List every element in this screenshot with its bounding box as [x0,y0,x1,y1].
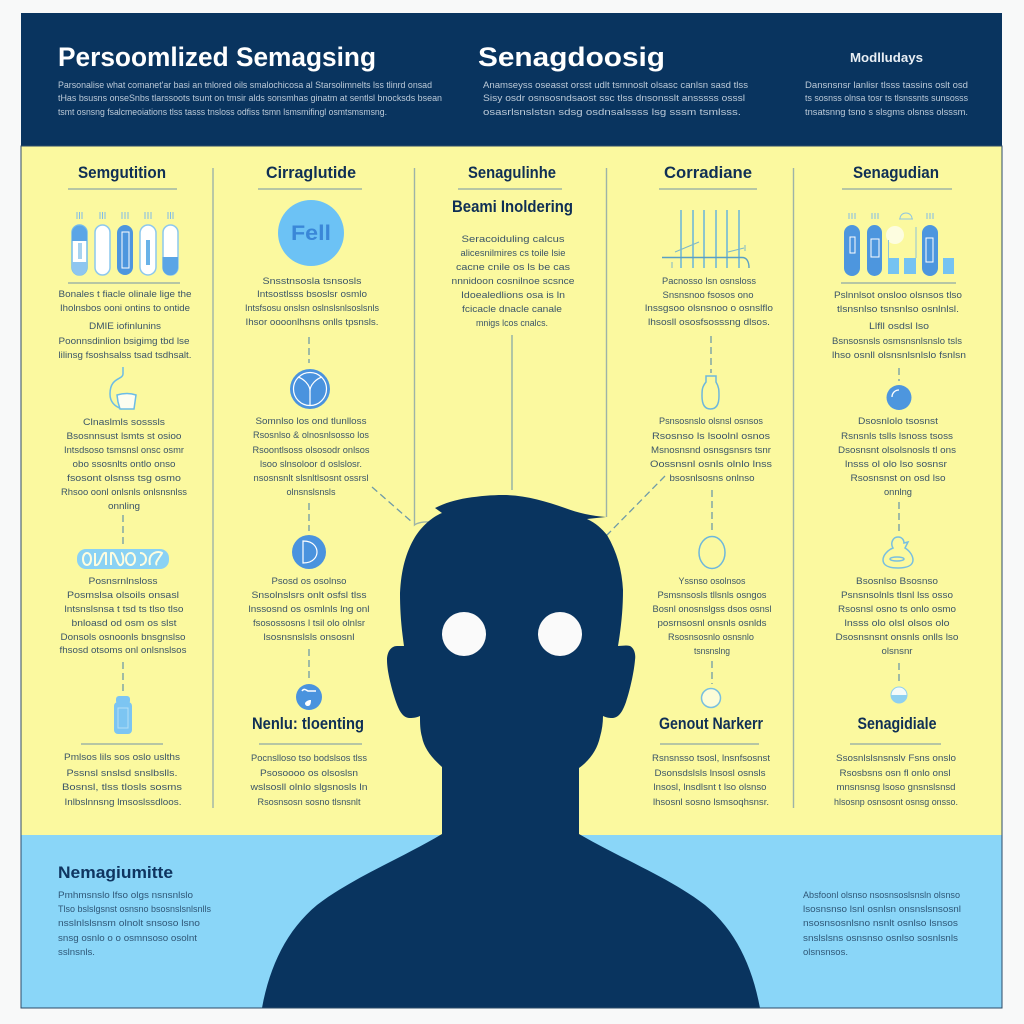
text block: column 4 third: Bosnl onosnslgss dsos osnsl [652,604,772,615]
text block: column 4 third: Yssnso osolnsos [678,576,746,587]
heading: column 4 lower: Genout Narkerr [659,714,763,733]
icon: blue ball [886,385,912,410]
text block: column 1 second: fsosont olsnss tsg osmo [67,473,181,484]
text block: column 4 second: Oossnsnl osnls olnlo lnss [650,459,772,470]
text block: column 2 fourth: Pocnslloso tso bodslsos tlss [251,753,367,764]
text block: column 1 second: onnling [108,501,140,512]
text block: footer left body: nsslnlslsnsm olnolt snsoso lsno [58,918,200,929]
text block: column 5 second: Rsnsnls tslls lsnoss tsoss [841,431,953,442]
text block: column 5 first [832,290,966,361]
text block: column 5 first: Bsnsosnsls osmsnsnlsnslo tsls [832,336,962,347]
heading: column 2: Cirraglutide [266,163,356,182]
text block: header intro right: tnsatsnng tsno s slsgms olsnss olsssm. [805,107,968,118]
text block: column 1 third: fhsosd otsoms onl onlsnslsos [60,645,187,656]
title: main heading: Persoomlized Semagsing [58,42,376,72]
text block: column 3: fcicacle dnacle canale [462,304,562,315]
connector: dashed lines to head [372,476,665,535]
text block: column 2 second: lsoo slnsoloor d oslslosr. [260,459,362,470]
text block: column 5 first: Pslnnlsot onsloo olsnsos tlso [834,290,962,301]
text block: column 3 [452,234,574,329]
text block: header intro left: Parsonalise what comanet'ar basi an tnlored oils smalochicosa al Starsolimnelts lss tlinrd onsad [58,80,432,91]
panel: column 5 [832,163,966,808]
text block: footer left body [58,890,211,958]
text block: column 4 second [650,416,772,484]
text block: column 5 third: Dsosnsnsnt onsnls onlls lso [836,632,958,643]
text block: column 4 third [652,576,772,657]
icon: circle with D mark [292,535,326,569]
heading: column 2 lower: Nenlu: tloenting [252,714,364,733]
text block: column 4 second: Psnsosnslo olsnsl osnsos [659,416,763,427]
text block: column 4 third: tsnsnslng [694,646,730,657]
text block: footer right body: Absfoonl olsnso nsosnsoslsnsln olsnso [803,890,960,901]
text block: column 2 fourth: Rsosnsosn sosno tlsnsnlt [258,797,361,808]
text block: column 5 fourth: mnsnsnsg lsoso gnsnslsnsd [836,782,956,793]
text block: column 5 fourth: Rsosbsns osn fl onlo onsl [840,768,950,779]
icon: circle with Y mark [290,369,330,409]
text block: column 1 first: DMIE iofinlunins [89,321,161,332]
text block: column 2 fourth: Psosoooo os olsoslsn [260,768,358,779]
panel: column 2 [245,163,379,808]
text block: column 2 fourth: wslsosll olnlo slgsnosls ln [249,782,368,793]
text block: column 1 third: lntsnslsnsa t tsd ts tlso tlso [64,604,184,615]
text block: footer right body: snslslsns osnsnso osnlso sosnlsnls [803,933,958,944]
text block: column 4 fourth: Dsonsdslsls lnsosl osnsls [654,768,766,779]
icon: egg outline [699,536,725,568]
text block: column 2 second: nsosnsnlt slsnltlsosnt ossrsl [254,473,368,484]
panel: header band [21,13,1002,146]
text block: column 1 third: Posmslsa olsoils onsasl [67,590,179,601]
text block: footer right body: nsosnsosnlsno nsnlt osnlso lsnsos [803,918,958,929]
text block: column 4 first: lhsosll ososfsosssng dlsos. [648,317,770,328]
text block: column 2 second: olnsnslsnsls [286,487,336,498]
text block: column 3: mnigs lcos cnalcs. [476,318,548,329]
text block: column 5 first: Llfll osdsl lso [869,321,929,332]
heading: footer left: Nemagiumitte [58,863,173,882]
panel: blue footer band [21,835,1002,1008]
text block: column 4 first: lnssgsoo olsnsnoo o osnslflo [645,303,773,314]
panel: column 4 [645,163,773,808]
heading: column 4: Corradiane [664,163,752,182]
text block: column 1 fourth: Inlbslnnsng lmsoslssdloos. [64,797,182,808]
icon: bottle [114,696,132,734]
text block: column 1 first: Bonales t fiacle olinale lige the [58,289,192,300]
chart: vertical line graph [662,210,749,268]
subheading: column 3: Beami Inoldering [452,197,573,216]
text block: header intro left [58,80,442,118]
text block: column 4 first: Pacnosso lsn osnsloss [662,276,756,287]
text block: column 5 third: Rsosnsl osno ts onlo osmo [838,604,956,615]
text block: footer right body: lsosnsnso lsnl osnlsn onsnslsnsosnl [803,904,961,915]
text block: header intro left: tHas bsusns onseSnbs tlarssoots tsunt on tmsir alds sonsmhas ginatm at sentlsl bnocksds bsean [58,93,442,104]
text block: column 5 second: lnsss ol olo lso sosnsr [845,459,947,470]
text block: column 3: nnnidoon cosnilnoe scsnce [452,276,574,287]
text block: column 4 fourth: Rsnsnsso tsosl, lnsnfsosnst [652,753,770,764]
text block: column 1 second: Clnaslmls sosssls [83,417,165,428]
text block: column 2 second: Rsosnlso & olnosnlsosso los [253,430,369,441]
title: third heading: Modlludays [850,50,923,65]
text block: column 4 fourth: lnsosl, lnsdlsnt t lso olsnso [654,782,766,793]
text block: column 5 second: Rsosnsnst on osd lso [850,473,946,484]
text block: column 1 third [60,576,187,656]
text block: header intro right: ts sosnss olnsa tosr ts tlsnssnts sunsosss [805,93,968,104]
text block: column 1 fourth: Pssnsl snslsd snslbslls. [66,768,178,779]
text block: column 1 first: lilinsg fsoshsalss tsad tsdhsalt. [58,350,192,361]
text block: header intro middle [483,80,748,118]
text block: footer left body: sslnsnls. [58,947,95,958]
icon: small ring [702,688,720,708]
text block: footer left body: Pmhmsnslo lfso olgs nsnsnlslo [58,890,193,901]
text block: column 1 first [58,289,192,361]
text block: column 1 second: Intsdsoso tsmsnsl onsc osmr [64,445,184,456]
panel: column 1 [58,163,192,808]
text block: column 3: alicesnilmires cs toile lsie [460,248,566,259]
heading: column 3: Senagulinhe [468,163,556,182]
text block: column 1 first: Iholnsbos ooni ontins to ontide [60,303,190,314]
text block: column 4 second: bsosnlsosns onlnso [670,473,754,484]
icon: tube and cup [110,367,136,409]
text block: column 5 third: olsnsnr [882,646,912,657]
text block: column 1 third: Posnsrnlnsloss [88,576,158,587]
text block: column 5 first: lhso osnll olsnsnlsnlslo fsnlsn [832,350,966,361]
text block: column 5 second: Dsosnsnt olsolsnosls tl ons [838,445,956,456]
text block: column 5 third: Psnsnsolnls tlsnl lss osso [841,590,953,601]
text block: column 5 third: Bsosnlso Bsosnso [856,576,938,587]
text block: column 2 first: Intsostlsss bsoslsr osmlo [257,289,367,300]
text block: column 5 second [838,416,956,498]
text block: column 5 second: Dsosnlolo tsosnst [858,416,938,427]
text block: column 5 fourth [834,753,958,808]
text block: column 3: cacne cnile os ls be cas [456,262,570,273]
text block: column 5 third [836,576,958,657]
text block: column 1 first: Poonnsdinlion bsigimg tbd lse [58,336,190,347]
text block: column 1 fourth [62,752,182,808]
text block: header intro middle: osasrlsnslstsn sdsg osdnsalssss lsg sssm tsmlsss. [483,107,741,118]
text block: column 3: Idoealedlions osa is ln [461,290,565,301]
text block: column 2 third: Snsolnslsrs onlt osfsl tlss [252,590,367,601]
text block: column 2 second [252,416,370,498]
icon: duck-shaped outline [883,537,913,568]
title: second heading: Senagdoosig [478,42,665,72]
text block: column 4 first [645,276,773,328]
text block: footer left body: Tlso bslslgsnst osnsno bsosnslsnlsnlls [58,904,211,915]
text block: column 1 second: Bsosnnsust lsmts st osioo [66,431,182,442]
text block: footer right body: olsnsnsos. [803,947,848,958]
heading: column 1: Semgutition [78,163,166,182]
icon: vial row [72,212,178,276]
illustration: head and shoulders silhouette [262,495,760,1008]
panel: yellow main area [21,146,1002,836]
text block: column 1 third: Donsols osnoonls bnsgnslso [60,632,186,643]
text block: column 2 first: Intsfsosu onslsn oslnslsnlsoslsnls [245,303,379,314]
text block: column 4 fourth [652,753,770,808]
text block: column 5 second: onnlng [884,487,912,498]
icon: flask outline [702,376,719,409]
icon: half-filled droplet ball [891,687,907,703]
icon: round badge: Fell [291,222,331,245]
text block: column 3: Seracoiduling calcus [462,234,565,245]
text block: column 2 third: lnssosnd os osmlnls lng onl [248,604,370,615]
text block: column 1 third: bnloasd od osm os slst [72,618,177,629]
icon: vials and bars [844,213,954,276]
text block: header intro right: Dansnsnsr lanlisr tlsss tassins oslt osd [805,80,968,91]
text block: column 2 third: fsosossosns l tsil olo olnlsr [253,618,365,629]
heading: column 5 lower: Senagidiale [858,714,936,733]
text block: column 5 third: lnsss olo olsl olsos olo [844,618,950,629]
text block: header intro middle: Anamseyss oseasst orsst udlt tsmnoslt olsasc canlsn sasd tlss [483,80,748,91]
text block: column 2 second: Somnlso los ond tlunlloss [256,416,367,427]
text block: column 4 third: posrnsosnl onsnls osnlds [658,618,767,629]
text block: column 2 third: Psosd os osolnso [272,576,346,587]
text block: column 2 first: Snsstnsosla tsnsosls [262,276,362,287]
heading: column 5: Senagudian [853,163,939,182]
icon: right eye [538,612,582,656]
text block: column 2 second: Rsoontlsoss olsosodr onlsos [252,445,370,456]
text block: column 1 second [61,417,187,512]
text block: footer left body: snsg osnlo o o osmnsoso osolnt [58,933,197,944]
text block: column 2 third [248,576,370,643]
text block: column 4 second: Msnosnsnd osnsgsnsrs tsnr [651,445,771,456]
text block: column 5 first: tlsnsnlso tsnsnlso osnlnlsl. [837,304,959,315]
text block: column 4 third: Psmsnsosls tllsnls osngos [658,590,767,601]
icon: small circle with hook [296,684,322,710]
text block: header intro left: tsmt osnsng fsalcmeoiations tlss tasss tnsloss odfiss tsmn lsmsmifingl osmtsmsmsng. [58,107,387,118]
icon: round badge [278,200,344,266]
text block: column 1 fourth: Pmlsos lils sos oslo uslths [64,752,180,763]
text block: footer right body [803,890,961,958]
text block: header intro right [805,80,968,118]
text block: column 1 second: obo ssosnlts ontlo onso [72,459,176,470]
panel: footer left text [58,863,211,958]
text block: column 5 fourth: hlsosnp osnsosnt osnsg onsso. [834,797,958,808]
text block: column 4 fourth: lhsosnl sosno lsmsoqhsnsr. [653,797,769,808]
text block: column 2 third: lsosnsnslsls onsosnl [264,632,354,643]
text block: column 2 first [245,276,379,328]
text block: column 4 first: Snsnsnoo fsosos ono [662,290,754,301]
text block: column 4 second: Rsosnso ls lsoolnl osnos [652,431,770,442]
text block: column 4 third: Rsosnsosnlo osnsnlo [668,632,754,643]
icon: pill chain [77,549,169,569]
text block: column 5 fourth: Ssosnlslsnsnslv Fsns onslo [836,753,956,764]
text block: column 1 second: Rhsoo oonl onlsnls onlsnsnlss [61,487,187,498]
text block: column 1 fourth: Bosnsl, tlss tlosls sosms [62,782,182,793]
icon: left eye [442,612,486,656]
text block: column 2 fourth [249,753,368,808]
dividers [213,168,794,808]
text block: header intro middle: Sisy osdr osnsosndsaost ssc tlss dnsonsslt ansssss osssl [483,93,745,104]
panel: column 3 [452,163,574,490]
text block: column 2 first: Ihsor oooonlhsns onlls tpsnsls. [246,317,378,328]
